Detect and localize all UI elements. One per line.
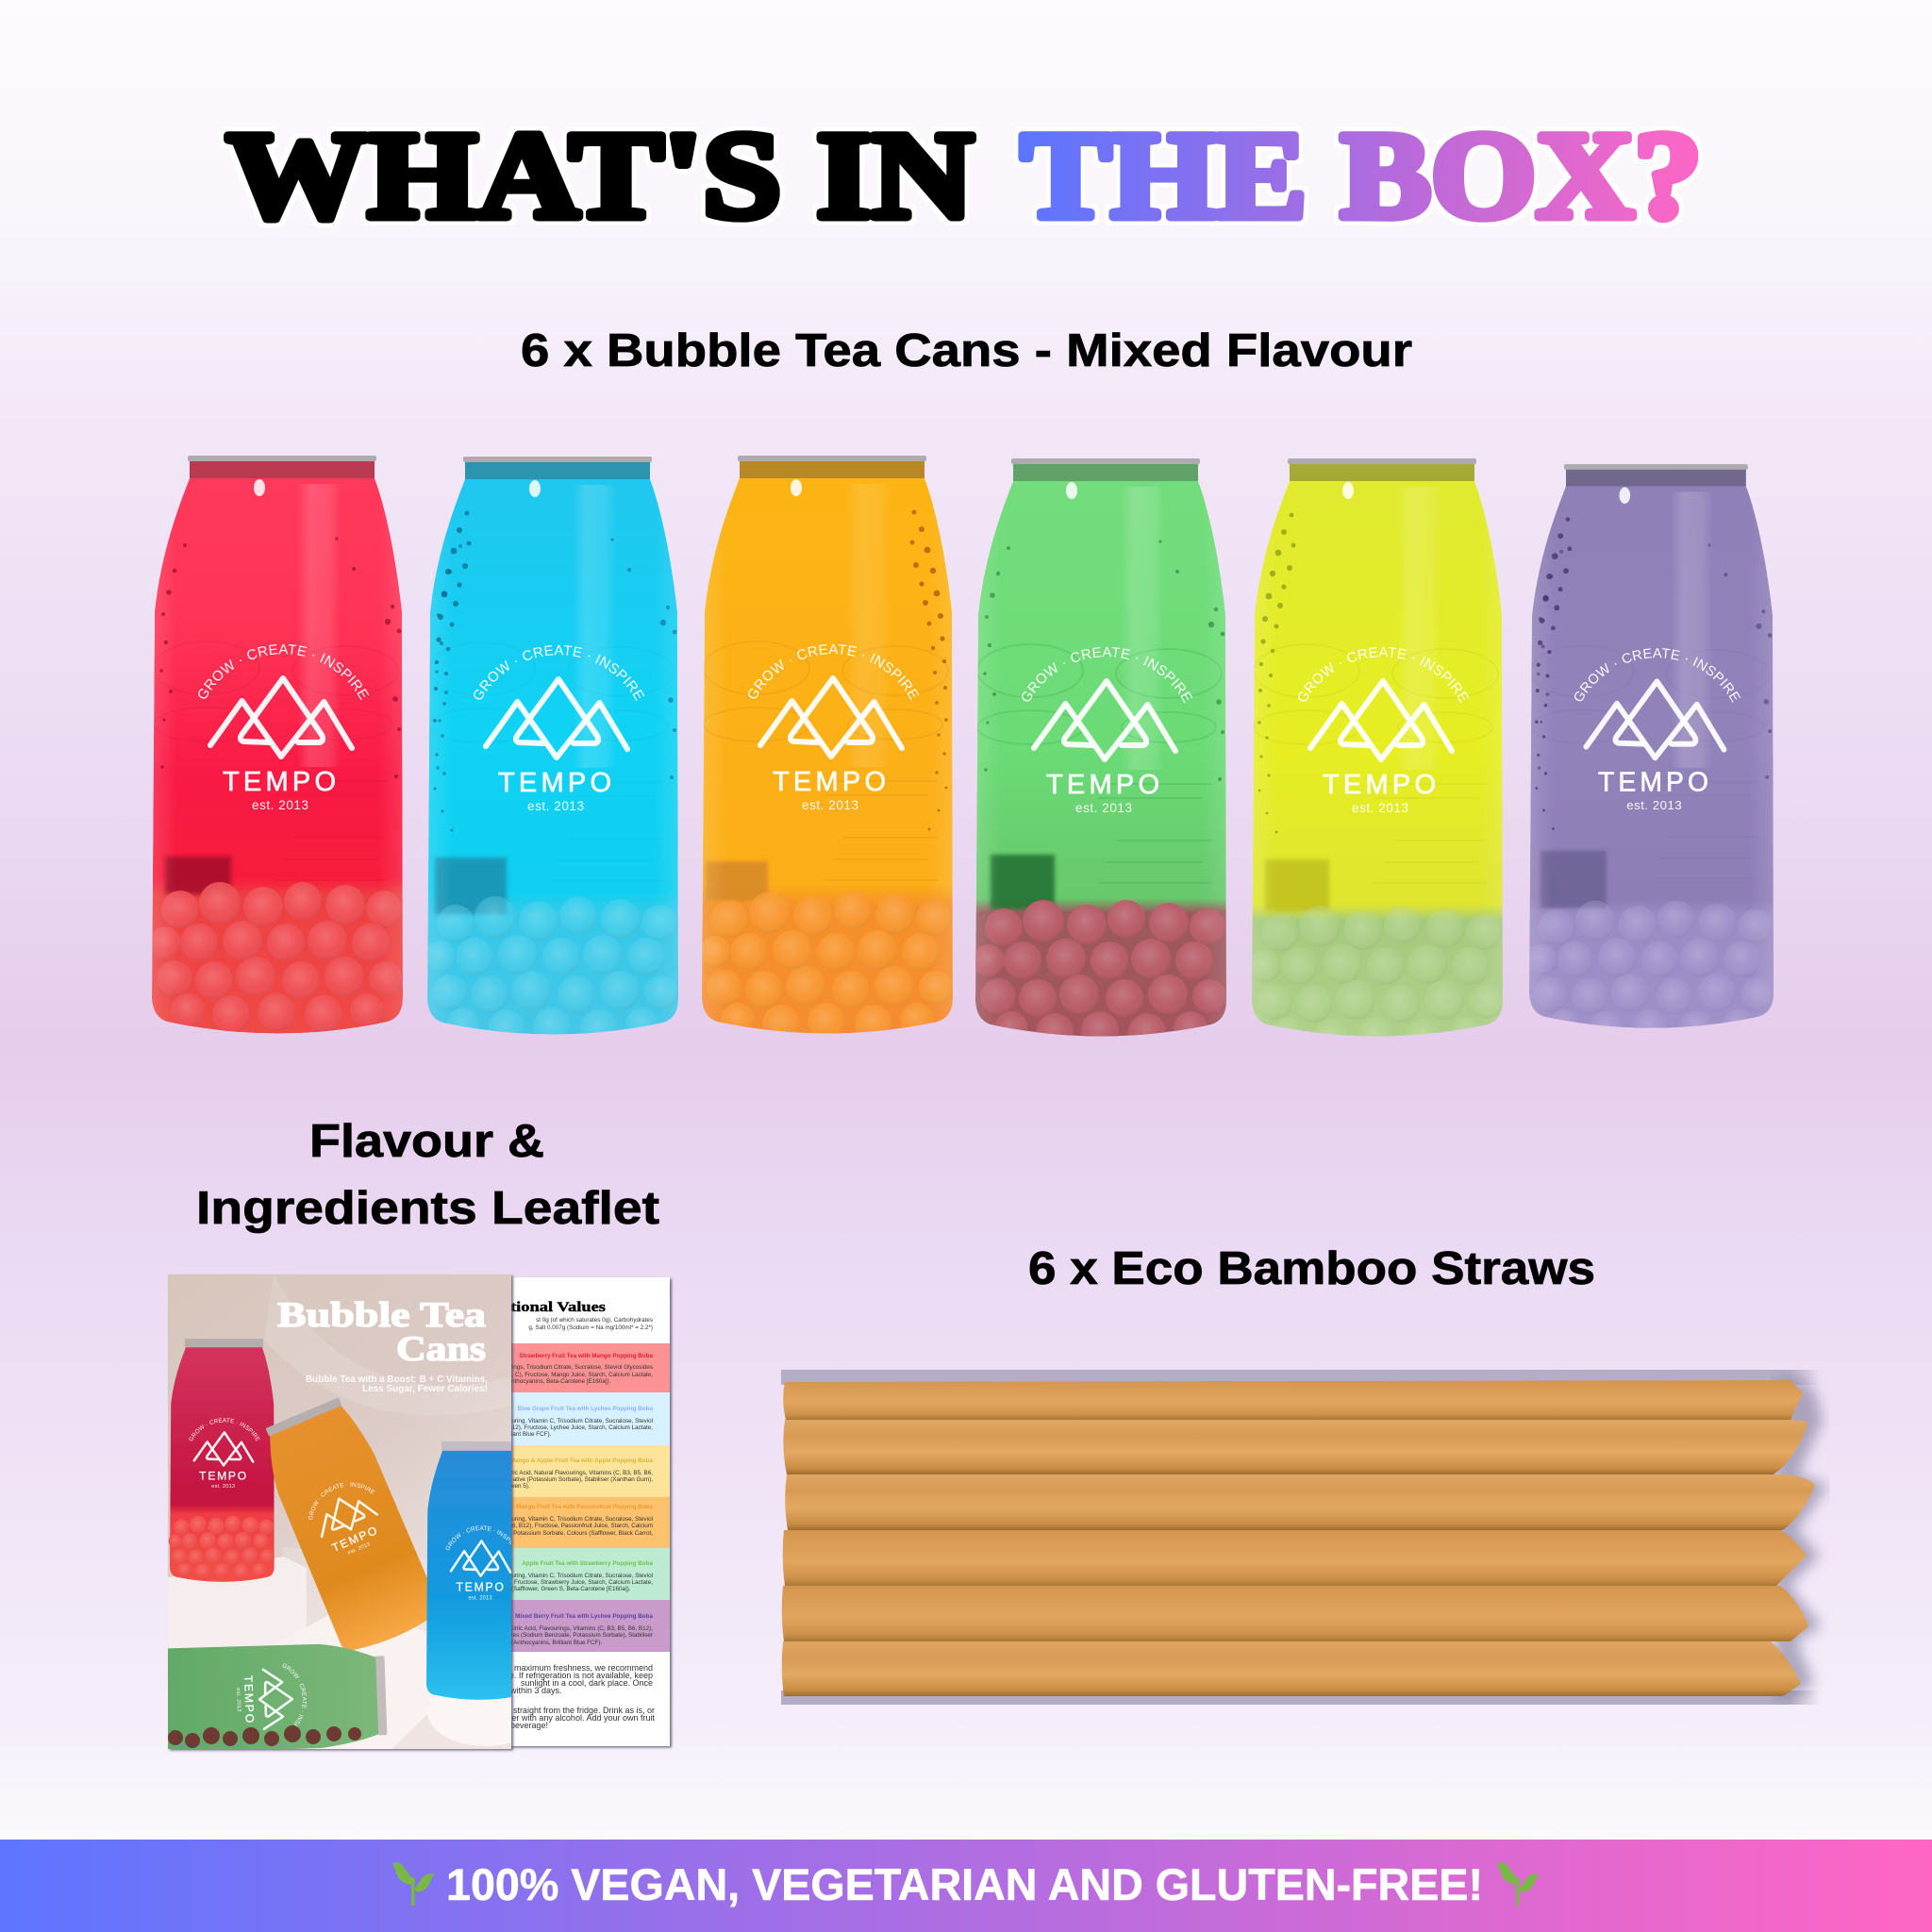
leaflet back page: nutritional values: ouring, Vitamin C, Trisodium Citrate, Sucralose, Steviol (508, 1573, 653, 1579)
straw 6 (782, 1641, 1801, 1696)
can: red strawberry: TEMPO (223, 767, 336, 797)
leaflet back page: nutritional values: Mango & Apple Fruit Tea with Apple Popping Boba (510, 1457, 653, 1464)
can: blue grape (427, 457, 678, 1034)
straw 5 (782, 1586, 1808, 1641)
heading: straws: 6 x Eco Bamboo Straws (1028, 1243, 1595, 1294)
leaflet back page: nutritional values: (Safflower, Green S, Beta-Carotene [E160a]). (511, 1586, 631, 1592)
cover can: blue (426, 1441, 511, 1700)
title: WHAT'S IN (226, 106, 974, 244)
leaflet back page: nutritional values: ouring, Vitamin C, Trisodium Citrate, Sucralose, Steviol (508, 1516, 653, 1523)
can: green apple: est. 2013 (1075, 801, 1132, 815)
leaflet back page: nutritional values: Blue Grape Fruit Tea with Lychee Popping Boba (518, 1406, 653, 1412)
can: yellow-orange mango apple: est. 2013 (802, 798, 858, 812)
leaflet back page: nutritional values: B12, C), Fructose, Mango Juice, Starch, Calcium Lactate, (501, 1372, 653, 1378)
cover title: Cans (396, 1330, 486, 1369)
cover can: blue: TEMPO (457, 1580, 504, 1594)
leaflet back page: nutritional values: B6, B12), Fructose, Passionfruit Juice, Starch, Calcium (508, 1523, 653, 1529)
leaflet back page: nutritional values: nthocyanins, Beta-Carotene [E160a]). (511, 1378, 611, 1385)
leaflet back page: nutritional values: tional Values (510, 1300, 606, 1315)
can: yellow-orange mango apple: GROW · CREATE · INSPIRE (748, 643, 919, 700)
straw 2 (783, 1420, 1808, 1474)
can: yellow mango: TEMPO (1323, 770, 1436, 800)
icon: seedling left (392, 1862, 434, 1906)
cover can: red (168, 1339, 275, 1582)
plinth left (168, 1557, 307, 1649)
cover can: orange tilted: GROW · CREATE · INSPIRE (308, 1482, 375, 1520)
leaflet back page: nutritional values: e, Citric Acid, Natural Flavourings, Vitamins (C, B3, B5, B6, (498, 1470, 653, 1476)
leaflet back page: nutritional values: ose, Citric Acid, Flavourings, Vitamins (C, B3, B5, B6, B12), (496, 1625, 653, 1632)
can: yellow-orange mango apple (702, 456, 953, 1034)
leaflet back page: nutritional values: maximum freshness, we recommend (514, 1663, 653, 1673)
leaflet back page: nutritional values: e. If refrigeration is not available, keep (509, 1671, 653, 1680)
cover can: orange tilted: est. 2013 (347, 1541, 371, 1557)
plinth right (300, 1615, 435, 1749)
leaflet back page: nutritional values: Apple Fruit Tea with Strawberry Popping Boba (522, 1560, 653, 1567)
leaflet (168, 1274, 674, 1753)
heading: leaflet: Flavour & (309, 1116, 544, 1167)
leaflet back page: nutritional values: (Anthocyanins, Brilliant Blue FCF). (511, 1640, 602, 1646)
cover can: blue: GROW · CREATE · INSPIRE (445, 1525, 511, 1551)
can: yellow mango (1252, 458, 1503, 1036)
leaflet back page: nutritional values: st 0g (of which saturates 0g), Carbohydrates (536, 1317, 653, 1324)
can: purple berry: GROW · CREATE · INSPIRE (1574, 648, 1741, 703)
leaflet back page: nutritional values: g, Salt 0.007g (Sodium = Na mg/100ml* = 2.2*) (528, 1324, 653, 1331)
can: red strawberry: GROW · CREATE · INSPIRE (198, 643, 370, 700)
can: green apple (975, 458, 1226, 1036)
cover title (277, 1296, 488, 1394)
cover title: Bubble Tea (277, 1296, 486, 1335)
straw 4 (783, 1530, 1807, 1586)
leaflet back page: nutritional values: Mango Fruit Tea with Passionfruit Popping Boba (516, 1504, 653, 1510)
heading: cans: 6 x Bubble Tea Cans - Mixed Flavour (521, 325, 1412, 376)
title: THE BOX? (1021, 106, 1702, 244)
leaflet back page: nutritional values: een 5). (511, 1483, 530, 1490)
leaflet back page: nutritional values: xer with any alcohol. Add your own fruit (508, 1713, 655, 1723)
can: blue grape: GROW · CREATE · INSPIRE (474, 645, 645, 702)
cans row (152, 456, 1774, 1036)
leaflet back page: nutritional values: Mixed Berry Fruit Tea with Lychee Popping Boba (515, 1613, 653, 1620)
leaflet cover photo (168, 1274, 515, 1753)
straw 1 (783, 1380, 1803, 1420)
cover can: orange tilted: TEMPO (330, 1524, 379, 1555)
cover can: green lying: GROW · CREATE · INSPIRE (283, 1664, 308, 1726)
cover can: red: TEMPO (199, 1469, 246, 1482)
footer text: 100% VEGAN, VEGETARIAN AND GLUTEN-FREE! (446, 1859, 1483, 1909)
cover can: red: est. 2013 (211, 1484, 235, 1490)
can: purple berry: est. 2013 (1626, 798, 1682, 812)
footer band (0, 1840, 1932, 1932)
cover can: green lying (168, 1643, 387, 1749)
leaflet back page: nutritional values: urings, Trisodium Citrate, Sucralose, Steviol Glycosides (507, 1364, 653, 1371)
leaflet back page: nutritional values: iant Blue FCF). (511, 1431, 552, 1438)
leaflet back page: nutritional values: ur, Potassium Sorbate, Colours (Safflower, Black Carrot, (505, 1530, 653, 1537)
cover can boba: green can (168, 1725, 361, 1748)
heading: leaflet: Ingredients Leaflet (196, 1183, 659, 1234)
can: yellow mango: est. 2013 (1352, 801, 1408, 815)
can: red strawberry: est. 2013 (252, 798, 308, 812)
can: green apple: TEMPO (1046, 770, 1159, 800)
icon: seedling right (1497, 1862, 1539, 1906)
leaflet back page: nutritional values: ative (Potassium Sorbate), Stabiliser (Xanthan Gum), (513, 1476, 653, 1483)
heading: leaflet (196, 1116, 659, 1234)
title (226, 106, 1702, 244)
can: yellow mango: GROW · CREATE · INSPIRE (1298, 647, 1470, 704)
can: yellow-orange mango apple: TEMPO (773, 767, 886, 797)
leaflet back page: nutritional values: ouring, Vitamin C, Trisodium Citrate, Sucralose, Steviol (508, 1418, 653, 1424)
cover can: red: GROW · CREATE · INSPIRE (189, 1418, 260, 1441)
leaflet back page: nutritional values: within 3 days. (509, 1686, 562, 1695)
can: purple berry: TEMPO (1598, 766, 1708, 796)
cover can: green lying: est. 2013 (235, 1688, 242, 1711)
can: purple berry (1529, 464, 1774, 1028)
leaflet back page: nutritional values: Strawberry Fruit Tea with Mango Popping Boba (519, 1353, 653, 1359)
leaflet back page: nutritional values: , B12), Fructose, Lychee Juice, Starch, Calcium Lactate, (505, 1424, 653, 1431)
cover title: Less Sugar, Fewer Calories! (362, 1383, 488, 1394)
leaflet back page: nutritional values: beverage! (510, 1721, 548, 1730)
can: blue grape: TEMPO (498, 768, 611, 798)
cover can: orange tilted (266, 1398, 427, 1650)
straw 3 (785, 1474, 1815, 1530)
can: blue grape: est. 2013 (527, 799, 584, 813)
bamboo straws (781, 1370, 1828, 1705)
leaflet back page: nutritional values: sunlight in a cool, dark place. Once (521, 1678, 653, 1688)
cover can: green lying: TEMPO (242, 1675, 257, 1723)
cover can: blue: est. 2013 (469, 1596, 492, 1602)
leaflet back page: nutritional values: straight from the fridge. Drink as is, or (513, 1706, 655, 1715)
cover title: Bubble Tea with a Boost: B + C Vitamins, (306, 1374, 488, 1385)
leaflet back page: nutritional values: atives (Sodium Benzoate, Potassium Sorbate), Stabiliser (504, 1632, 653, 1639)
leaflet back page: nutritional values (496, 1277, 670, 1746)
leaflet back page: nutritional values: B12), Fructose, Strawberry Juice, Starch, Calcium Lactate, (498, 1579, 653, 1586)
cylinder plinth (427, 1696, 511, 1746)
can: green apple: GROW · CREATE · INSPIRE (1022, 647, 1192, 704)
can: red strawberry (152, 456, 403, 1034)
straw shadow (781, 1370, 1828, 1705)
